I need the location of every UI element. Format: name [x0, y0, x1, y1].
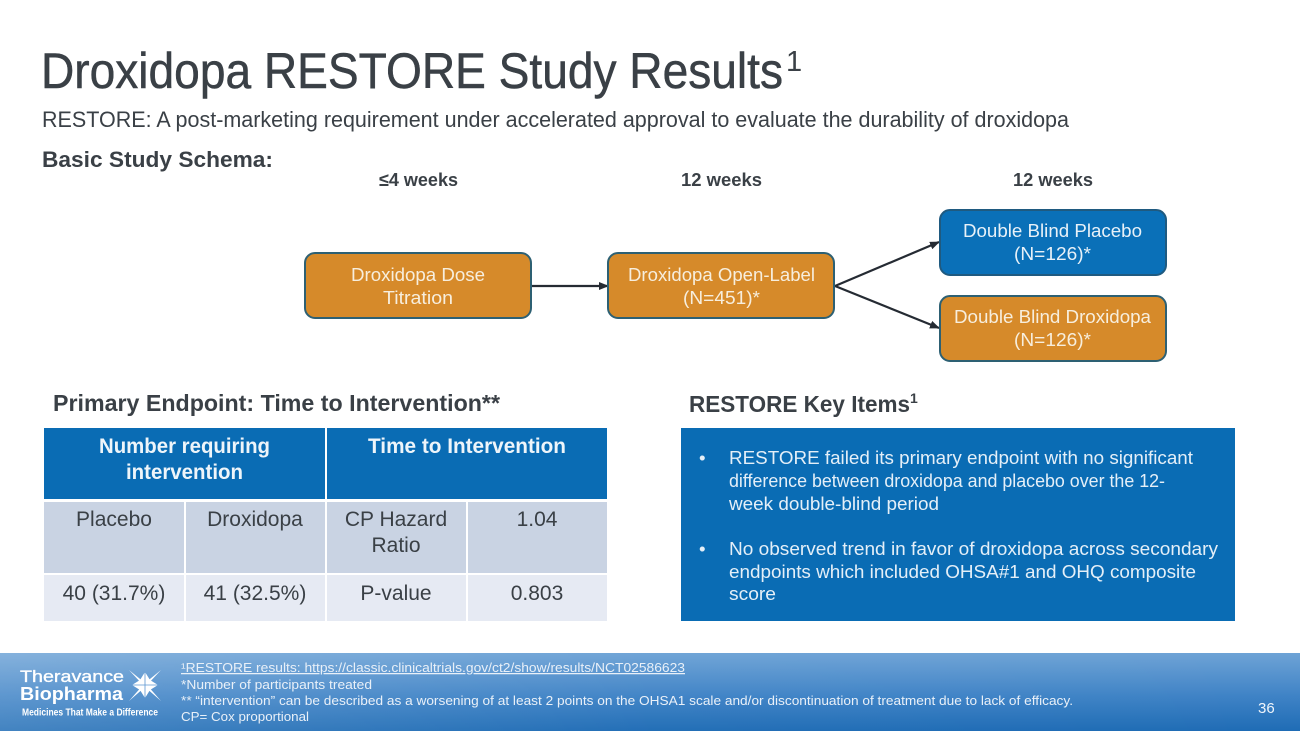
panel: key items: week double-blind period [728, 493, 939, 514]
title: Droxidopa RESTORE Study Results [41, 43, 783, 99]
box: dose titration: Droxidopa Dose [351, 265, 485, 285]
table: Placebo [76, 508, 152, 531]
box: open label [608, 253, 834, 318]
panel: key items: endpoints which included OHSA#1 and OHQ composite [729, 561, 1196, 582]
box: double blind droxidopa: Double Blind Droxidopa [954, 307, 1152, 327]
table: 1.04 [517, 508, 558, 531]
subtitle: RESTORE: A post-marketing requirement under accelerated approval to evaluate the durability of droxidopa [42, 107, 1070, 132]
panel: key items: difference between droxidopa and placebo over the 12- [729, 470, 1165, 491]
panel: key items: RESTORE failed its primary endpoint with no significant [729, 447, 1194, 468]
schema timeline labels: 12 weeks [681, 169, 762, 190]
box: open label: Droxidopa Open-Label [628, 265, 815, 285]
logo: Medicines That Make a Difference [22, 708, 158, 718]
table: 41 (32.5%) [204, 582, 306, 605]
table: Ratio [371, 534, 421, 557]
footer band [0, 653, 1300, 731]
panel: key items [681, 428, 1235, 621]
panel: key items: No observed trend in favor of droxidopa across secondary [729, 538, 1219, 559]
schema timeline labels: 12 weeks [1013, 169, 1093, 190]
footnotes: *Number of participants treated [181, 678, 372, 692]
heading: key items: 1 [910, 390, 918, 406]
schema timeline labels [379, 169, 1093, 190]
box: dose titration [305, 253, 531, 318]
table: P-value [360, 582, 432, 605]
table: 40 (31.7%) [63, 582, 165, 605]
box: double blind placebo: Double Blind Placebo [963, 221, 1142, 241]
table [44, 428, 607, 621]
page number: 36 [1258, 700, 1275, 717]
box: open label: (N=451)* [683, 288, 760, 308]
heading: basic study schema: Basic Study Schema: [42, 147, 273, 172]
box: double blind droxidopa [940, 296, 1166, 361]
box: double blind droxidopa: (N=126)* [1014, 330, 1091, 350]
footnotes: ** “intervention” can be described as a worsening of at least 2 points on the OHSA1 scale and/or discontinuation of treatment due to lack of efficacy. [181, 694, 1073, 708]
box: double blind placebo [940, 210, 1166, 275]
logo: Theravance [20, 667, 124, 686]
table: intervention [126, 461, 243, 484]
panel: key items: • [699, 447, 706, 468]
footnotes: CP= Cox proportional [181, 710, 309, 724]
footnotes: ¹RESTORE results: https://classic.clinicaltrials.gov/ct2/show/results/NCT02586623 [181, 661, 685, 675]
icon: star [129, 670, 161, 701]
table: Droxidopa [207, 508, 303, 531]
table: Time to Intervention [368, 435, 566, 458]
logo [20, 667, 161, 718]
table: Number requiring [99, 435, 270, 458]
panel: key items: • [699, 538, 706, 559]
footnotes [181, 661, 1073, 724]
title: 1 [786, 46, 802, 78]
panel: key items: score [729, 583, 776, 604]
box: dose titration: Titration [383, 288, 453, 308]
heading: key items: RESTORE Key Items [689, 391, 910, 417]
heading: primary endpoint: Primary Endpoint: Time to Intervention** [53, 390, 500, 416]
logo: Biopharma [20, 684, 124, 704]
table: CP Hazard [345, 508, 447, 531]
box: double blind placebo: (N=126)* [1014, 244, 1091, 264]
arrows [532, 242, 939, 328]
schema timeline labels: ≤4 weeks [379, 169, 458, 190]
table: 0.803 [511, 582, 563, 605]
